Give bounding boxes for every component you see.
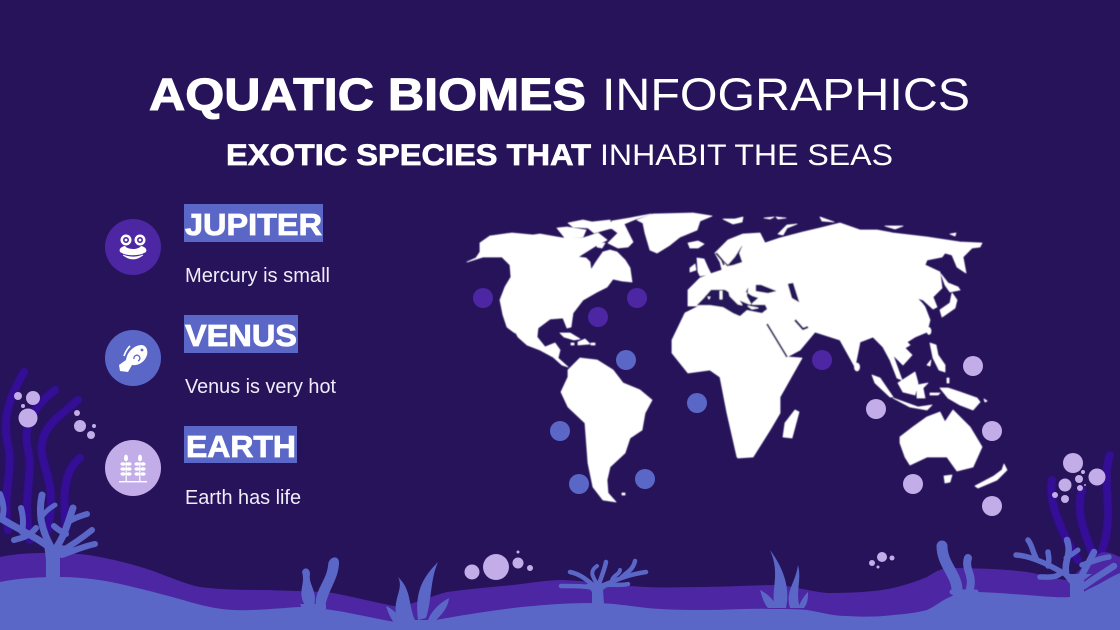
title [149,69,970,120]
coral: left [0,494,95,580]
map markers: purple [473,288,832,370]
inland seas [697,246,808,357]
coral: right [1016,540,1114,597]
bubbles: right [1052,453,1106,503]
bubbles: left [14,391,96,439]
Australia [900,410,982,471]
Madagascar [783,410,799,438]
heading: Venus: VENUS [185,318,297,353]
Africa [672,303,802,458]
Arctic islands [557,214,651,248]
bubbles: lower right [869,552,894,568]
icon: wheat [105,440,161,496]
text: Earth description: Earth has life [185,487,301,509]
Southeast Asia islands [872,343,987,410]
Caribbean islands [560,333,625,495]
Sri Lanka [854,363,860,371]
Europe islands [688,241,711,276]
kelp: right [942,546,976,592]
title: AQUATIC BIOMES [149,69,586,120]
panel: Venus legend item [105,315,336,398]
subtitle: INHABIT THE SEAS [600,139,893,172]
heading: Earth: EARTH [186,429,296,464]
Tasmania and New Zealand [944,464,1007,488]
South America [561,358,652,502]
North America [467,233,632,367]
kelp: left centre [300,557,339,609]
text: Venus description: Venus is very hot [185,376,336,398]
map markers: blue [550,350,707,494]
coral: centre [561,561,646,604]
subtitle [226,139,893,172]
text: Jupiter description: Mercury is small [185,265,330,287]
right dark seaweed [1051,455,1110,560]
icon: fish [105,330,161,386]
Eurasia [688,223,982,380]
Greenland [637,213,712,253]
icon: frog [105,219,161,275]
Arctic Russia islands [723,217,956,236]
seabed: blue wave [0,573,1120,630]
panel: Jupiter legend item [105,204,330,287]
East Asia islands [940,274,960,317]
seabed: purple wave [0,552,1120,630]
panel: Earth legend item [105,426,301,509]
Italy and Mediterranean islands [708,288,758,309]
world map [467,213,1007,502]
kelp: centre left [386,562,449,628]
left dark seaweed [6,372,80,540]
map markers: lilac [866,356,1002,516]
heading: Jupiter: JUPITER [185,207,322,242]
kelp: centre right [760,550,808,608]
bubbles: centre [464,550,533,580]
subtitle: EXOTIC SPECIES THAT [226,139,591,172]
title: INFOGRAPHICS [602,69,970,120]
